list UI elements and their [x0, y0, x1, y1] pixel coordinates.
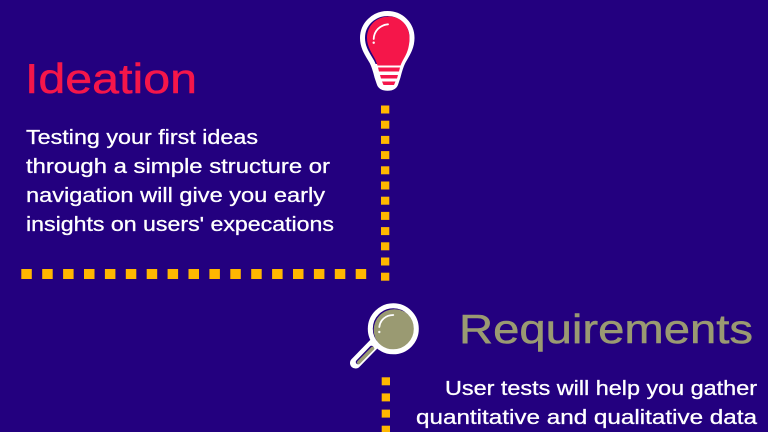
dotted connector: horizontal [21, 269, 366, 279]
heading: Ideation: Ideation [25, 55, 197, 102]
text block: Ideation description: insights on users' expecations [26, 213, 334, 236]
text block: Ideation description [26, 126, 334, 236]
dotted connector: vertical lower [382, 377, 390, 432]
text block: Requirements description: User tests will help you gather [445, 377, 757, 400]
text block: Requirements description [416, 377, 758, 429]
heading: Requirements: Requirements [459, 306, 753, 352]
dotted connector: vertical upper [381, 106, 389, 281]
text block: Ideation description: Testing your first ideas [26, 126, 258, 149]
text block: Ideation description: navigation will give you early [26, 184, 326, 207]
icon: magnifying glass [356, 306, 416, 363]
text block: Ideation description: through a simple structure or [26, 155, 330, 178]
text block: Requirements description: quantitative and qualitative data [416, 406, 758, 429]
icon: light bulb [362, 14, 412, 88]
